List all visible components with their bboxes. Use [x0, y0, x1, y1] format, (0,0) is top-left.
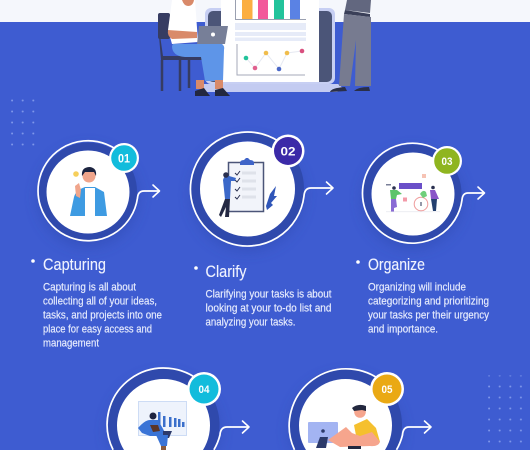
dot pattern: bottom right: [480, 376, 526, 446]
heading: Capturing: Capturing: [43, 256, 106, 274]
ring: [38, 141, 159, 241]
text: Capturing body: tasks, and projects into one: [43, 310, 162, 322]
step 03: [362, 143, 484, 249]
top white band: [0, 0, 530, 22]
ring: [289, 368, 431, 450]
arrowhead: [326, 182, 333, 194]
shadow: [362, 149, 462, 249]
number badge 02: [272, 134, 304, 168]
ring: [362, 143, 484, 243]
text lines: [235, 23, 306, 41]
heading: Clarify: Clarify: [206, 263, 247, 281]
icon: man with idea: [70, 167, 107, 216]
step 05: [289, 368, 431, 450]
shadow: [192, 139, 304, 251]
number badge 02: 02: [280, 144, 296, 158]
seated person with laptop: [158, 0, 230, 96]
step 01: [38, 141, 160, 247]
text: Organize body: categorizing and prioritizing: [368, 296, 489, 308]
white disc: [299, 379, 392, 450]
text: Organize body: Organizing will include: [368, 282, 466, 294]
text: Clarify body: [206, 288, 332, 328]
text: Organize body: and importance.: [368, 324, 438, 336]
bar chart: [236, 0, 306, 20]
number badge 05: 05: [382, 384, 392, 396]
arrowhead: [424, 421, 431, 433]
shadow: [38, 147, 138, 247]
dot pattern: top left: [4, 92, 38, 150]
hero illustration: [158, 0, 371, 96]
icon: checklist clipboard: [219, 158, 277, 217]
arrowhead: [242, 421, 249, 433]
text: Capturing body: [43, 282, 162, 350]
ring: [107, 368, 249, 450]
arrowhead: [478, 187, 484, 199]
white disc: [372, 152, 454, 236]
number badge 04: [187, 372, 221, 406]
white disc: [46, 150, 130, 234]
icon: person at computer: [308, 405, 380, 449]
arrowhead: [153, 185, 160, 197]
text: Clarify body: Clarifying your tasks is about: [206, 288, 332, 300]
ring: [190, 132, 333, 246]
step 04: [107, 368, 249, 450]
number badge 04: 04: [198, 384, 210, 396]
text: Clarify body: looking at your to-do list and: [206, 302, 332, 314]
white disc: [200, 142, 295, 236]
standing person: [330, 0, 371, 92]
text: Organize body: [368, 282, 490, 336]
number badge 05: [370, 372, 404, 406]
text: Organize body: your tasks per their urgency: [368, 310, 490, 322]
heading: Organize: Organize: [368, 256, 425, 274]
number badge 03: 03: [442, 156, 452, 168]
line chart: [237, 44, 305, 75]
white disc: [117, 379, 210, 450]
icon: presentation board: [202, 0, 344, 92]
icon: calendar and team: [386, 174, 440, 212]
shadow: [290, 375, 402, 450]
text: Capturing body: collecting all of your ideas,: [43, 296, 157, 308]
shadow: [108, 375, 220, 450]
text: Capturing body: management: [43, 338, 99, 350]
icon: analyst at chart screen: [138, 402, 186, 450]
text: Capturing body: Capturing is all about: [43, 282, 136, 294]
text: Clarify body: analyzing your tasks.: [206, 316, 296, 328]
number badge 01: 01: [118, 151, 130, 165]
text: Capturing body: place for easy access and: [43, 324, 152, 336]
step 02: [190, 132, 333, 251]
